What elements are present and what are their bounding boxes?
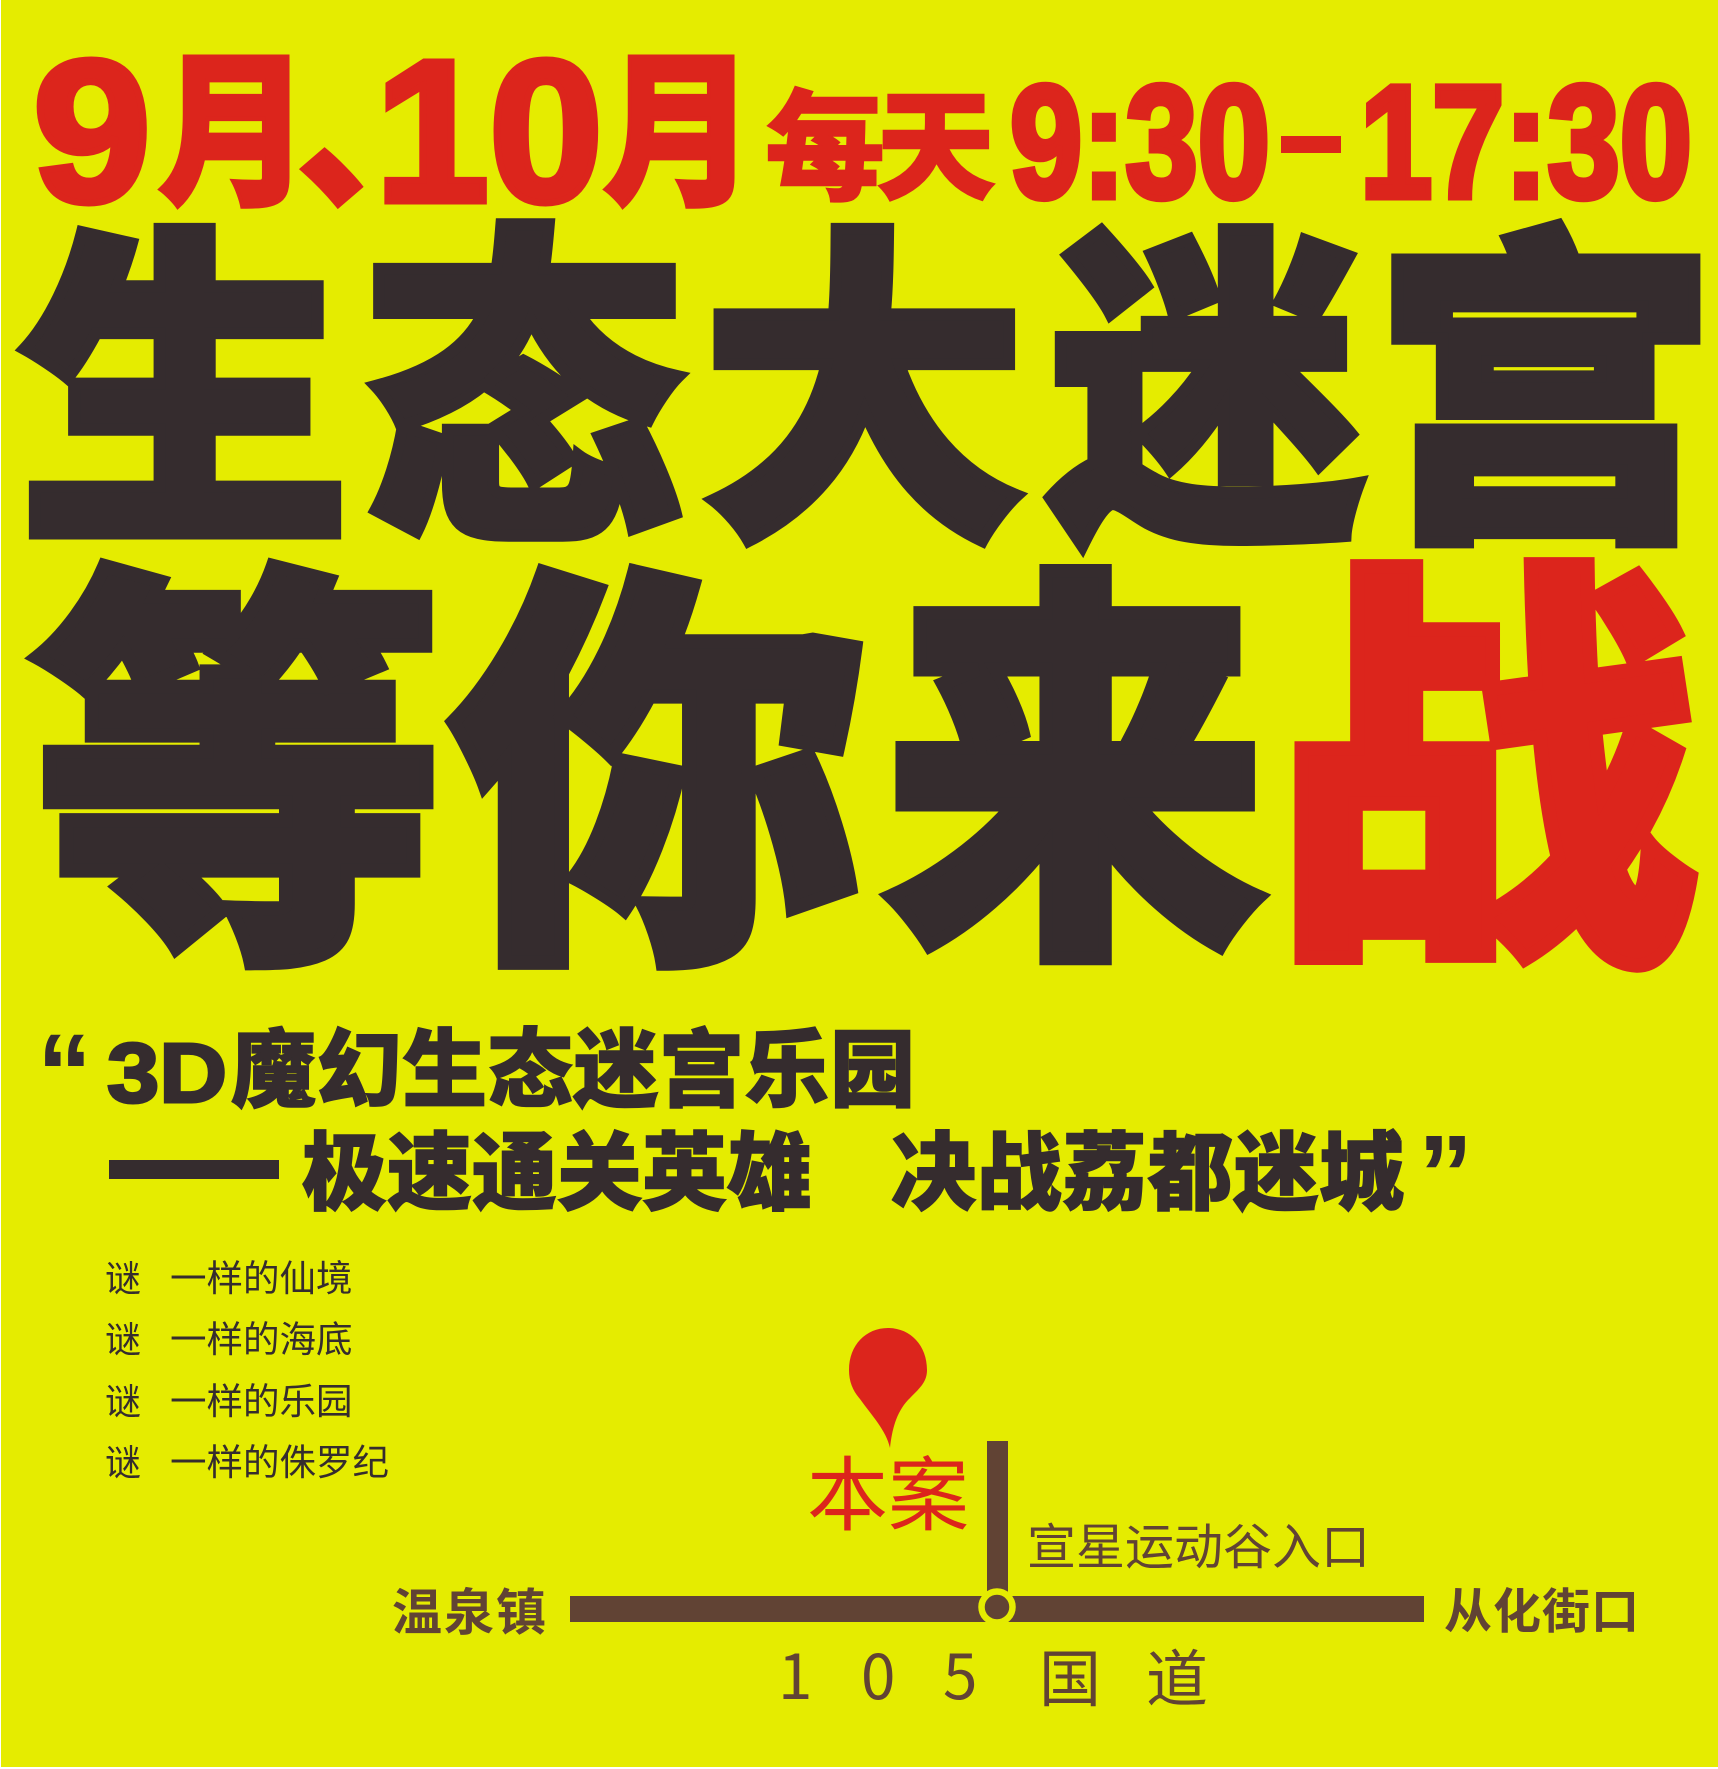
title line two: 战 — [1273, 539, 1695, 1015]
side road — [987, 1441, 1008, 1601]
title line two: 等 — [33, 550, 443, 1012]
road name: 5 — [943, 1627, 977, 1717]
slogan line one: 魔幻生态迷宫乐园 — [231, 1002, 915, 1125]
riddle list: 谜 — [105, 1373, 141, 1425]
heading: daily hours: 天 — [876, 51, 996, 225]
heading: daily hours: 每 — [765, 51, 885, 225]
heading: daily hours — [765, 51, 996, 225]
slogan line two — [109, 1105, 1404, 1228]
heading: months — [33, 0, 755, 244]
title line one: 态 — [366, 212, 682, 581]
riddle list: 一样的海底 — [170, 1310, 352, 1363]
road name: 1 — [778, 1627, 812, 1717]
title line two: 你 — [451, 549, 865, 1012]
heading: months: 月 — [603, 0, 755, 239]
location map — [392, 1328, 1639, 1719]
heading: months: 、 — [299, 7, 459, 239]
title line two: 来 — [884, 551, 1266, 1007]
slogan line one: 3D — [107, 1026, 227, 1120]
heading: months: 10 — [375, 18, 603, 244]
title line one: 大 — [702, 213, 1026, 582]
opening quote: “ — [37, 1012, 92, 1135]
title line one: 迷 — [1049, 214, 1363, 582]
title line two — [33, 539, 1695, 1015]
entrance label: 宣星运动谷入口 — [1027, 1508, 1370, 1579]
heading: months: 9 — [33, 18, 151, 244]
closing quote: ” — [1418, 1113, 1473, 1236]
junction marker — [982, 1592, 1012, 1622]
location label: 本案 — [807, 1431, 969, 1548]
riddle list: 一样的侏罗纪 — [170, 1433, 389, 1486]
slogan line two: 决战荔都迷城 — [891, 1105, 1404, 1228]
map pin — [849, 1328, 927, 1448]
right town label: 从化街口 — [1444, 1572, 1639, 1642]
title line one: 生 — [19, 212, 349, 581]
road name: 国 — [1039, 1629, 1101, 1719]
main road — [570, 1596, 1424, 1622]
riddle list: 谜 — [105, 1434, 141, 1486]
heading: months: 月 — [158, 0, 310, 239]
riddle list: 谜 — [105, 1250, 141, 1302]
date and hours line — [33, 0, 1692, 244]
title line one — [19, 212, 1715, 582]
road name — [778, 1627, 1208, 1719]
road name: 0 — [861, 1627, 895, 1717]
slogan line two: 极速通关英雄 — [302, 1105, 812, 1228]
left town label: 温泉镇 — [392, 1573, 546, 1645]
riddle list — [105, 1249, 389, 1486]
road name: 道 — [1146, 1629, 1208, 1719]
slogan — [37, 1002, 1473, 1236]
heading: time range — [1010, 52, 1692, 231]
riddle list: 一样的乐园 — [170, 1372, 352, 1425]
riddle list: 谜 — [105, 1311, 141, 1363]
riddle list: 一样的仙境 — [170, 1249, 352, 1302]
heading: time range: 9:30 — [1010, 52, 1270, 231]
title line one: 宫 — [1375, 213, 1715, 581]
